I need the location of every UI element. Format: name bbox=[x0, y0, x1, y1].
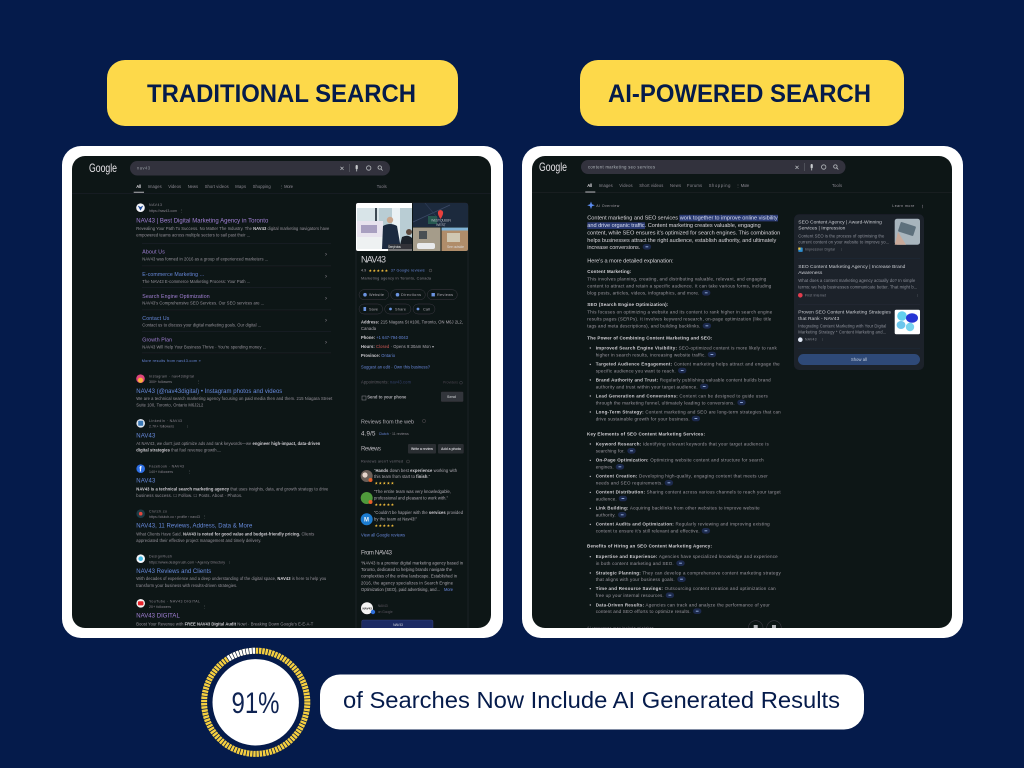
business name and rating: 4.9 bbox=[361, 269, 366, 273]
section: key elements: Content Audits and Optimization: Regularly reviewing and improving existing bbox=[596, 522, 770, 527]
sitelink: about us: NAV43 was formed in 2016 as a group of experienced marketers ... bbox=[142, 256, 268, 261]
search result: NAV43 site with sitelinks bbox=[136, 203, 331, 363]
statistic caption: of Searches Now Include AI Generated Results bbox=[343, 687, 840, 713]
section: SEO bbox=[587, 302, 773, 329]
from NAV43 description: From NAV43 bbox=[361, 550, 393, 556]
business name and rating: Marketing agency in Toronto, Canada bbox=[361, 277, 432, 281]
business details: Providers bbox=[443, 381, 458, 385]
google search bar: Google bbox=[539, 160, 567, 174]
business photos and map: See outside bbox=[447, 245, 464, 249]
business details: Address: 215 Niagara St #100, Toronto, ON M6J 2L2, bbox=[361, 319, 463, 324]
source card: impression: Impression Digital bbox=[805, 248, 835, 252]
search result: designrush: https://www.designrush.com › Agency Directory bbox=[149, 560, 225, 564]
source card: impression: SEO Content Agency | Award-Winning bbox=[798, 219, 882, 225]
from NAV43 description: 2016, the agency specializes in Search Engine bbox=[361, 580, 454, 585]
business name and rating: NAV43 bbox=[361, 255, 386, 265]
section: key elements: content to ensure it's still relevant and effective. bbox=[596, 529, 700, 534]
section: content marketing: content to attract and retain a specific audience. It can take various forms, including bbox=[587, 284, 772, 289]
section: SEO: tags and meta descriptions), and building backlinks. bbox=[587, 324, 700, 329]
section: power of combining: higher in search results, increasing website traffic. bbox=[596, 352, 706, 357]
search tabs: News bbox=[670, 183, 681, 188]
progress ring: 91% bbox=[204, 651, 307, 754]
search tabs: Videos bbox=[619, 183, 633, 188]
google reviews: professional and pleasant to work with.” bbox=[374, 495, 449, 500]
source card: impression: Content SEO is the process of optimising the bbox=[798, 233, 885, 238]
panel: traditional search screenshot bbox=[62, 146, 503, 638]
section: content marketing: blog posts, articles, videos, infographics, and more. bbox=[587, 291, 699, 296]
source card: NAV43: Proven SEO Content Marketing Strategies bbox=[798, 310, 891, 316]
business photos and map: WEST bbox=[436, 223, 447, 227]
search result: designrush: NAV43 Reviews and Clients bbox=[136, 569, 211, 575]
search tabs bbox=[532, 183, 952, 193]
google search bar: ✕ bbox=[340, 166, 345, 172]
search result: youtube: 20+ followers bbox=[149, 605, 171, 609]
business photos and map: WEST QUEEN bbox=[431, 218, 451, 222]
overview summary with highlight: . Content marketing creates valuable, engaging bbox=[645, 223, 761, 229]
section: power of combining: through the marketing funnel, ultimately leading to conversions. bbox=[596, 400, 735, 405]
from NAV43 description: NAV43 bbox=[362, 606, 372, 610]
search result: instagram: ⋮ bbox=[197, 380, 200, 384]
from NAV43 description: Toronto, dedicated to helping brands navigate the bbox=[361, 567, 453, 572]
search result: facebook: ⋮ bbox=[188, 470, 191, 474]
search result: instagram: 300+ followers bbox=[149, 380, 172, 384]
source card: first internet: SEO Content Marketing Agency | Increase Brand bbox=[798, 264, 906, 270]
section: benefits: Time and Resource Savings: Outsourcing content creation and optimization can bbox=[596, 586, 776, 591]
search result: linkedin: At NAV43, we don't just optimize ads and rank keywords—we engineer high-impact, data-driven bbox=[136, 441, 321, 446]
search result: facebook: NAV43 bbox=[136, 479, 156, 485]
section: SEO: results pages (SERPs). It involves keyword research, on-page optimization (like title bbox=[587, 317, 772, 322]
search result: clutch: https://clutch.co › profile › nav43 bbox=[149, 515, 200, 519]
search result: designrush: With decades of experience and a deep understanding of the digital space, NAV43 is here to help you bbox=[136, 576, 326, 581]
search result: instagram: Instagram · nav43digital bbox=[149, 374, 194, 378]
action buttons: Save bbox=[369, 307, 378, 311]
AI disclaimer and feedback buttons bbox=[587, 620, 782, 628]
source card: first internet: ⋮ bbox=[916, 293, 919, 297]
search result: instagram: Suite 100, Toronto, Ontario M6J2L2 bbox=[136, 402, 204, 407]
sitelink: e-commerce marketing: › bbox=[325, 274, 327, 280]
source card: NAV43: Marketing Strategy * Content Marketing and... bbox=[798, 329, 886, 334]
search tabs: ⋮ More bbox=[736, 183, 750, 188]
reviews from the web: 4.9/5 bbox=[361, 431, 376, 438]
section: content marketing bbox=[587, 269, 772, 296]
section: power of combining: Lead Generation and Conversions: Content can be designed to guide users bbox=[596, 393, 768, 398]
search result: NAV43 site with sitelinks: NAV43 | Best Digital Marketing Agency in Toronto bbox=[136, 219, 269, 225]
section: power of combining: drive sustainable growth for your business. bbox=[596, 416, 690, 421]
statistic caption bbox=[320, 674, 864, 730]
google search bar: content marketing seo services bbox=[588, 164, 655, 169]
search result: youtube bbox=[136, 599, 314, 626]
section: key elements: Content Distribution: Sharing content across various channels to reach your target bbox=[596, 490, 781, 495]
search tabs: Tools bbox=[377, 184, 387, 189]
search result: linkedin: NAV43 bbox=[136, 433, 156, 439]
heading: AI-powered search bbox=[580, 60, 904, 126]
search result: NAV43 site with sitelinks: NAV43 bbox=[149, 203, 162, 207]
action buttons bbox=[359, 290, 457, 314]
search result: NAV43 site with sitelinks: More results from nav43.com » bbox=[142, 359, 201, 363]
google search bar: Google bbox=[89, 161, 117, 175]
google search bar: ✕ bbox=[794, 166, 800, 172]
sources sidebar: ⋮ bbox=[921, 203, 925, 209]
source card: first internet: terms: we help businesses communicate better. That might b... bbox=[798, 284, 917, 289]
section: key elements: engines. bbox=[596, 465, 614, 470]
sitelink: contact us: › bbox=[325, 318, 327, 324]
section: power of combining: specific audience you want to reach. bbox=[596, 368, 676, 373]
sitelink: e-commerce marketing: E-commerce Marketing ... bbox=[142, 272, 204, 278]
section: power of combining: Brand Authority and Trust: Regularly publishing valuable content builds brand bbox=[596, 377, 771, 382]
business details: Send to your phone bbox=[367, 394, 407, 399]
business details: Canada bbox=[361, 326, 377, 331]
from NAV43 description: complexities of the online landscape. Established in bbox=[361, 574, 458, 579]
source card: impression: current content on your website to improve yo... bbox=[798, 240, 889, 245]
from NAV43 description: NAV43 bbox=[378, 604, 388, 608]
sitelink: search engine optimization: NAV43's Comprehensive SEO Services. Our SEO services are ... bbox=[142, 300, 264, 305]
google search bar bbox=[539, 160, 846, 174]
section: key elements: audience. bbox=[596, 496, 617, 501]
google reviews: Write a review bbox=[411, 447, 433, 451]
google reviews: M bbox=[364, 518, 369, 524]
source card: first internet: First Internet bbox=[805, 293, 826, 297]
overview summary with highlight: and drive organic traffic bbox=[587, 223, 645, 229]
google reviews bbox=[361, 444, 464, 538]
overview summary with highlight: helps businesses attract the right audience, establish authority, and ultimately bbox=[587, 238, 777, 244]
section: benefits: that aligns with your business goals. bbox=[596, 577, 675, 582]
from NAV43 description: Optimization (SEO), paid advertising, and... bbox=[361, 587, 440, 592]
section: key elements: searching for. bbox=[596, 449, 625, 454]
knowledge panel: NAV43 business profile bbox=[356, 203, 468, 634]
sitelink: growth plan: › bbox=[325, 340, 327, 346]
source card: NAV43: that Rank - NAV43 bbox=[798, 316, 840, 322]
search result: linkedin bbox=[136, 419, 321, 453]
search tabs: Images bbox=[599, 183, 613, 188]
google search bar bbox=[89, 161, 390, 176]
business details bbox=[361, 319, 463, 402]
google reviews: Reviews aren't verified bbox=[361, 460, 403, 464]
search result: youtube: Boost Your Revenue with FREE NAV43 Digital Audit Now! · Breaking Down Google's E-E-A-T bbox=[136, 621, 314, 626]
section: benefits: Data-Driven Results: Agencies can track and analyze the performance of your bbox=[596, 602, 770, 607]
sitelink: contact us: Contact us to discuss your digital marketing goals. Our digital ... bbox=[142, 322, 261, 327]
sitelink: e-commerce marketing: The NAV43 E-commerce Marketing Process: Your Path ... bbox=[142, 279, 250, 284]
section: key elements: Keyword Research: Identifying relevant keywords that your target audience is bbox=[596, 441, 769, 446]
section: benefits: Benefits of Hiring an SEO Content Marketing Agency: bbox=[587, 544, 712, 549]
AI overview label bbox=[587, 202, 620, 209]
search tabs: Tools bbox=[832, 183, 842, 188]
google reviews: “Couldn't be happier with the services provided bbox=[374, 510, 464, 515]
sources sidebar bbox=[794, 203, 925, 370]
from NAV43 description bbox=[361, 550, 464, 634]
section: benefits: free up your internal resources. bbox=[596, 593, 664, 598]
search result: instagram bbox=[136, 374, 333, 407]
search result: facebook: Facebook · NAV43 bbox=[149, 464, 184, 468]
section: content marketing: Content Marketing: bbox=[587, 269, 632, 274]
source card: first internet: Awareness bbox=[798, 270, 823, 276]
business name and rating bbox=[361, 255, 432, 281]
section: power of combining: Targeted Audience Engagement: Content marketing helps attract and engage the bbox=[596, 362, 780, 367]
search result: instagram: We are a technical search marketing agency focusing on paid media then and them. 215 Niagara Street bbox=[136, 396, 333, 401]
sitelink: growth plan bbox=[142, 338, 327, 349]
business details: Province: Ontario bbox=[361, 353, 396, 358]
google reviews: this team from start to finish.” bbox=[374, 474, 431, 479]
reviews from the web bbox=[361, 419, 426, 438]
panel: AI-powered search screenshot bbox=[522, 146, 963, 638]
overview summary with highlight bbox=[587, 215, 780, 265]
search tabs: News bbox=[188, 184, 198, 189]
source card: impression: ⋮ bbox=[840, 248, 843, 252]
from NAV43 description: More bbox=[444, 587, 454, 592]
google reviews: Add a photo bbox=[441, 447, 461, 451]
business details: Suggest an edit · Own this business? bbox=[361, 365, 431, 370]
section: key elements: Link Building: Acquiring backlinks from other websites to improve website bbox=[596, 506, 760, 511]
from NAV43 description: on Google bbox=[378, 610, 393, 614]
reviews from the web: Reviews from the web bbox=[361, 420, 414, 426]
sitelink: about us bbox=[142, 250, 327, 261]
show all button: Show all bbox=[851, 357, 867, 362]
action buttons: Website bbox=[369, 293, 384, 297]
section: benefits: content and SEO efforts to optimize results. bbox=[596, 609, 691, 614]
search tabs: Short videos bbox=[639, 183, 663, 188]
search tabs: Short videos bbox=[205, 184, 229, 189]
source card: NAV43: Integrating Content Marketing with Your Digital bbox=[798, 323, 886, 328]
google search bar: nav43 bbox=[137, 166, 151, 171]
search result: instagram: NAV43 (@nav43digital) • Instagram photos and videos bbox=[136, 389, 282, 395]
business photos and map: See photos bbox=[388, 245, 401, 249]
from NAV43 description: NAV'43 bbox=[393, 623, 403, 627]
section: key elements: needs and SEO requirements. bbox=[596, 481, 663, 486]
business details: Appointments: nav43.com bbox=[361, 380, 412, 385]
heading: AI-powered search: AI-POWERED SEARCH bbox=[608, 80, 871, 108]
section: benefits: Strategic Planning: They can develop a comprehensive content marketing strategy bbox=[596, 570, 781, 575]
overview summary with highlight: content, while SEO ensures it's optimized for search engines. This combination bbox=[587, 230, 780, 236]
section: power of combining bbox=[587, 335, 781, 421]
AI disclaimer and feedback buttons: AI responses may include mistakes. bbox=[587, 626, 655, 630]
search result: clutch: NAV43, 11 Reviews, Address, Data & More bbox=[136, 524, 253, 530]
search tabs: ⋮ More bbox=[279, 184, 294, 189]
section: content marketing: This involves planning, creating, and distributing valuable, relevant, and engaging bbox=[587, 277, 767, 282]
business details: Phone: +1 647-794-0043 bbox=[361, 335, 409, 340]
section: key elements: Content Creation: Developing high-quality, engaging content that meets user bbox=[596, 474, 768, 479]
search result: youtube: NAV43 DIGITAL bbox=[136, 614, 180, 620]
sources sidebar: Learn more bbox=[892, 204, 914, 208]
google reviews: View all Google reviews bbox=[361, 533, 405, 538]
business photos and map bbox=[356, 203, 468, 251]
section: SEO: SEO (Search Engine Optimization): bbox=[587, 302, 669, 307]
google reviews: Reviews bbox=[361, 447, 381, 453]
sitelink: contact us: Contact Us bbox=[142, 316, 170, 322]
search result: linkedin: LinkedIn · NAV43 bbox=[149, 419, 182, 423]
section: SEO: This focuses on optimizing a website and its content to rank higher in search engine bbox=[587, 310, 773, 315]
source card: first internet bbox=[798, 264, 920, 304]
overview summary with highlight: work together to improve online visibility bbox=[679, 215, 778, 221]
search result: youtube: ⋮ bbox=[203, 605, 206, 609]
section: key elements: authority. bbox=[596, 513, 616, 518]
heading: traditional search: TRADITIONAL SEARCH bbox=[147, 80, 416, 108]
action buttons: Reviews bbox=[437, 293, 453, 297]
search tabs: Shopping bbox=[709, 183, 731, 188]
overview summary with highlight: increase conversions. bbox=[587, 245, 641, 251]
overview summary with highlight: Here's a more detailed explanation: bbox=[587, 259, 674, 265]
section: power of combining: Improved Search Engine Visibility: SEO-optimized content is more likely to rank bbox=[596, 345, 777, 350]
AI overview label: AI Overview bbox=[596, 204, 620, 208]
sitelink: search engine optimization: › bbox=[325, 296, 327, 302]
section: power of combining: Long-Term Strategy: Content marketing and SEO are long-term strategies that can bbox=[596, 409, 781, 414]
action buttons: Directions bbox=[401, 293, 421, 297]
section: key elements: Key Elements of SEO Content Marketing Services: bbox=[587, 431, 706, 436]
sitelink: contact us bbox=[142, 316, 327, 327]
source card: NAV43: ⋮ bbox=[821, 338, 824, 342]
reviews from the web: Clutch · 11 reviews bbox=[379, 432, 409, 436]
search tabs: All bbox=[136, 184, 141, 189]
heading: traditional search bbox=[107, 60, 458, 126]
sitelink: growth plan: NAV43 Will Help Your Business Thrive · You're spending money ... bbox=[142, 344, 266, 349]
source card: NAV43 bbox=[798, 310, 920, 342]
search result: clutch bbox=[136, 509, 314, 543]
business details: Hours: Closed · Opens 9:30am Mon ▾ bbox=[361, 344, 434, 349]
google reviews: “The entire team was very knowledgable, bbox=[374, 489, 451, 494]
source card: first internet: What does a content marketing agency actually do? In simple bbox=[798, 278, 916, 283]
search result: NAV43 site with sitelinks: Revealing Your Path To Success. No Matter The Industry. The NAV43 digital marketing navigators have bbox=[136, 226, 330, 231]
search result: youtube: YouTube · NAV43 DIGITAL bbox=[149, 599, 200, 603]
search result: facebook bbox=[136, 464, 329, 498]
search tabs: Images bbox=[148, 184, 162, 189]
search result: clutch: ⋮ bbox=[203, 515, 206, 519]
search result: facebook: 140+ followers bbox=[149, 470, 173, 474]
search tabs: Shopping bbox=[253, 184, 271, 189]
section: benefits bbox=[587, 544, 781, 614]
business details: Send bbox=[447, 395, 457, 399]
search result: clutch: Clutch.co bbox=[149, 510, 167, 514]
search result: clutch: appreciated their effective project management and timely delivery. bbox=[136, 538, 261, 543]
search result: NAV43 site with sitelinks: https://nav43.com bbox=[149, 209, 177, 213]
sitelink: about us: About Us bbox=[142, 250, 165, 256]
search result: designrush bbox=[136, 554, 326, 588]
source card: impression: Services | Impression bbox=[798, 225, 846, 231]
sitelink: search engine optimization bbox=[142, 294, 327, 305]
search result: designrush: DesignRush bbox=[149, 555, 172, 559]
sitelink: about us: › bbox=[325, 252, 327, 258]
search result: designrush: ⋮ bbox=[228, 560, 232, 564]
sitelink: e-commerce marketing bbox=[142, 272, 327, 284]
search result: facebook: NAV43 is a technical search marketing agency that uses insights, data, and growth strategy to drive bbox=[136, 486, 329, 491]
search tabs: All bbox=[587, 183, 592, 188]
AI overview content bbox=[587, 202, 781, 635]
section: key elements: On-Page Optimization: Optimizing website content and structure for search bbox=[596, 458, 764, 463]
section: benefits: in both content marketing and SEO. bbox=[596, 561, 674, 566]
business name and rating: 37 Google reviews bbox=[391, 269, 425, 273]
google reviews: by the team at Nav43!” bbox=[374, 516, 418, 521]
search tabs: Maps bbox=[235, 184, 246, 189]
action buttons: Share bbox=[395, 307, 406, 311]
search result: clutch: What Clients Have Said. NAV43 is noted for good value and budget-friendly pricing. Clients bbox=[136, 532, 314, 537]
source card: NAV43: NAV43 bbox=[805, 338, 817, 342]
sitelink: growth plan: Growth Plan bbox=[142, 338, 172, 344]
section: power of combining: authority and trust within your target audience. bbox=[596, 384, 698, 389]
search result: linkedin: 2.7K+ followers bbox=[149, 425, 174, 429]
show all button bbox=[798, 354, 920, 365]
search result: NAV43 site with sitelinks: empowered teams across multiple sectors to sail past their ... bbox=[136, 232, 250, 237]
search result: designrush: transform your business with results-driven strategies. bbox=[136, 583, 237, 588]
search result: facebook: f bbox=[139, 467, 142, 474]
section: benefits: Expertise and Experience: Agencies have specialized knowledge and experience bbox=[596, 554, 778, 559]
search tabs bbox=[72, 184, 491, 194]
search tabs: Videos bbox=[168, 184, 181, 189]
source card: impression bbox=[798, 218, 920, 252]
search result: NAV43 site with sitelinks: ⋮ bbox=[180, 209, 184, 213]
action buttons: Call bbox=[423, 307, 430, 311]
section: key elements bbox=[587, 431, 781, 534]
from NAV43 description: “NAV43 is a premier digital marketing agency based in bbox=[361, 560, 464, 565]
search result: facebook: business success. ☐ Follow. ☐ Posts. About · Photos. bbox=[136, 493, 242, 498]
search result: linkedin: digital strategies that fuel revenue growth.... bbox=[136, 448, 221, 453]
section: power of combining: The Power of Combining Content Marketing and SEO: bbox=[587, 335, 713, 340]
search result: linkedin: ⋮ bbox=[186, 425, 189, 429]
search tabs: Forums bbox=[687, 183, 702, 188]
progress ring: 91%: 91% bbox=[232, 687, 280, 720]
google reviews: “Hands down best experience working with bbox=[374, 468, 458, 473]
sitelink: search engine optimization: Search Engine Optimization bbox=[142, 294, 210, 300]
overview summary with highlight: Content marketing and SEO services bbox=[587, 215, 678, 221]
